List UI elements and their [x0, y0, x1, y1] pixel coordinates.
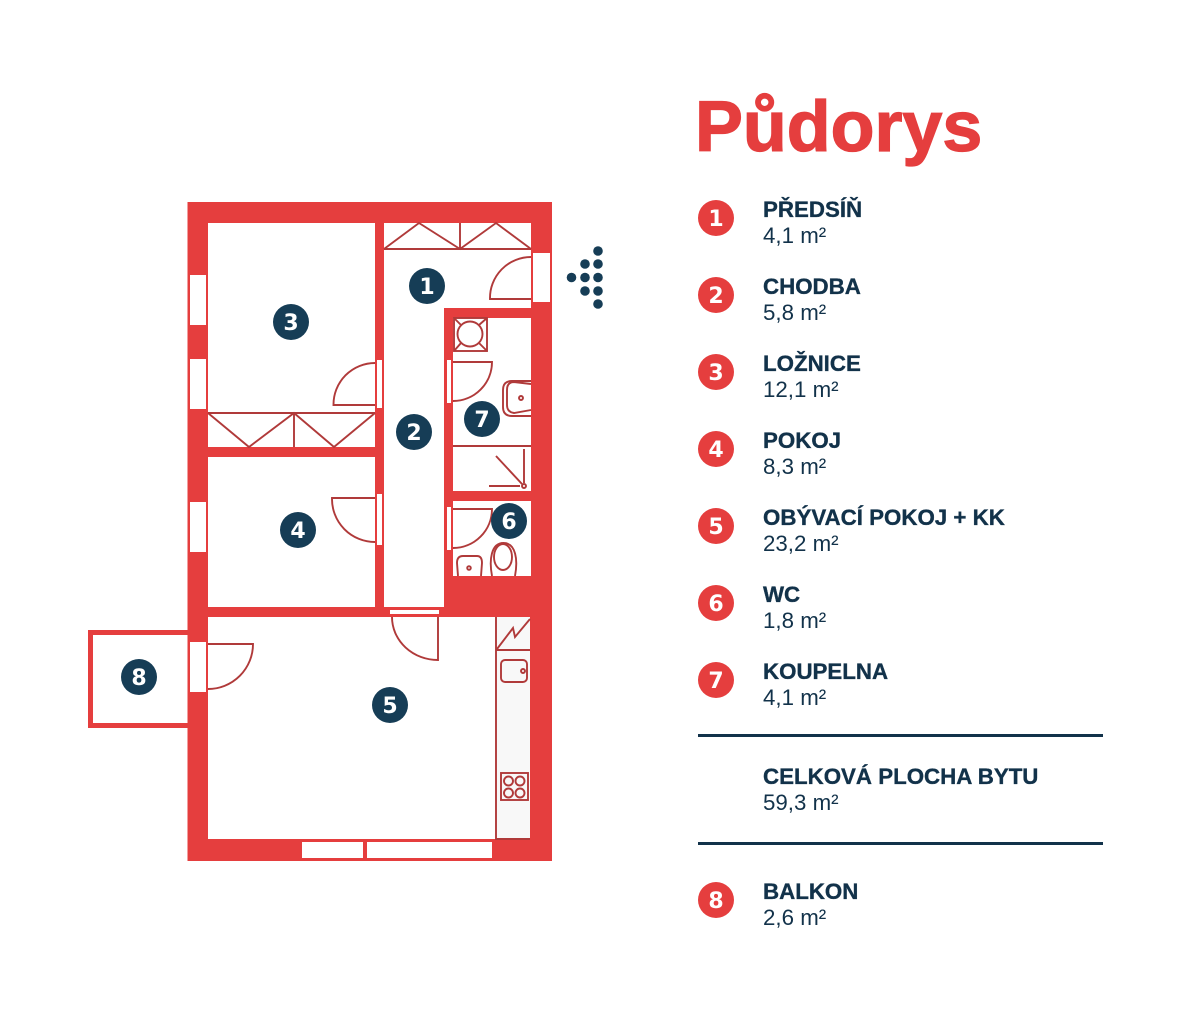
toilet: [491, 543, 516, 576]
total area: [763, 764, 1038, 815]
room marker 6: [491, 503, 527, 539]
legend item 8: [698, 879, 858, 930]
room marker 5: 5: [382, 694, 398, 719]
legend item 8: 8: [708, 889, 724, 914]
kitchen unit: [496, 617, 530, 839]
legend item 3: 12,1 m²: [763, 377, 839, 402]
rooms: [208, 223, 531, 839]
legend item 2: [698, 274, 861, 325]
room marker 5: [372, 687, 408, 723]
room marker 1: [409, 268, 445, 304]
room marker 8: [121, 659, 157, 695]
legend item 6: [698, 582, 826, 633]
room marker 6: 6: [501, 510, 517, 535]
title: Půdorys: [695, 87, 982, 167]
washing machine: [454, 318, 487, 351]
legend item 2: CHODBA: [763, 274, 861, 299]
legend item 1: 4,1 m²: [763, 223, 826, 248]
wc sink: [457, 556, 482, 576]
entrance arrow dots: [567, 246, 603, 309]
total area: CELKOVÁ PLOCHA BYTU: [763, 764, 1038, 789]
legend item 7: 4,1 m²: [763, 685, 826, 710]
legend item 6: 1,8 m²: [763, 608, 826, 633]
balcony: [88, 630, 188, 728]
shower: [453, 446, 531, 488]
legend item 5: 5: [708, 515, 724, 540]
legend item 4: [698, 428, 841, 479]
legend item 6: 6: [708, 592, 724, 617]
room marker 8: 8: [131, 666, 147, 691]
wardrobe: bedroom: [208, 413, 375, 447]
legend item 2: 2: [708, 284, 724, 309]
room marker 1: 1: [419, 275, 435, 300]
legend item 7: 7: [708, 669, 724, 694]
legend item 3: LOŽNICE: [763, 351, 861, 376]
wardrobe: hall: [384, 223, 531, 249]
legend item 5: 23,2 m²: [763, 531, 839, 556]
legend item 4: POKOJ: [763, 428, 841, 453]
room marker 2: 2: [406, 421, 422, 446]
legend item 3: 3: [708, 361, 724, 386]
room marker 7: 7: [474, 408, 490, 433]
legend item 1: [698, 197, 862, 248]
floor plan: [88, 202, 552, 861]
room marker 2: [396, 414, 432, 450]
walls: [188, 202, 552, 861]
room marker 4: [280, 512, 316, 548]
total area: 59,3 m²: [763, 790, 839, 815]
windows and door openings: [190, 253, 550, 858]
bathroom sink: [503, 381, 531, 416]
legend item 2: 5,8 m²: [763, 300, 826, 325]
legend item 5: OBÝVACÍ POKOJ + KK: [763, 505, 1005, 530]
room marker 7: [464, 401, 500, 437]
legend item 7: KOUPELNA: [763, 659, 888, 684]
legend item 8: 2,6 m²: [763, 905, 826, 930]
legend item 1: PŘEDSÍŇ: [763, 197, 862, 222]
room marker 3: [273, 304, 309, 340]
legend: [698, 197, 1103, 930]
legend item 3: [698, 351, 861, 402]
legend item 5: [698, 505, 1005, 556]
legend item 6: WC: [763, 582, 800, 607]
room marker 3: 3: [283, 311, 299, 336]
legend item 4: 8,3 m²: [763, 454, 826, 479]
legend item 1: 1: [708, 207, 724, 232]
legend item 7: [698, 659, 888, 710]
room marker 4: 4: [290, 519, 306, 544]
legend item 4: 4: [708, 438, 724, 463]
legend item 8: BALKON: [763, 879, 858, 904]
door swings: [208, 257, 531, 689]
